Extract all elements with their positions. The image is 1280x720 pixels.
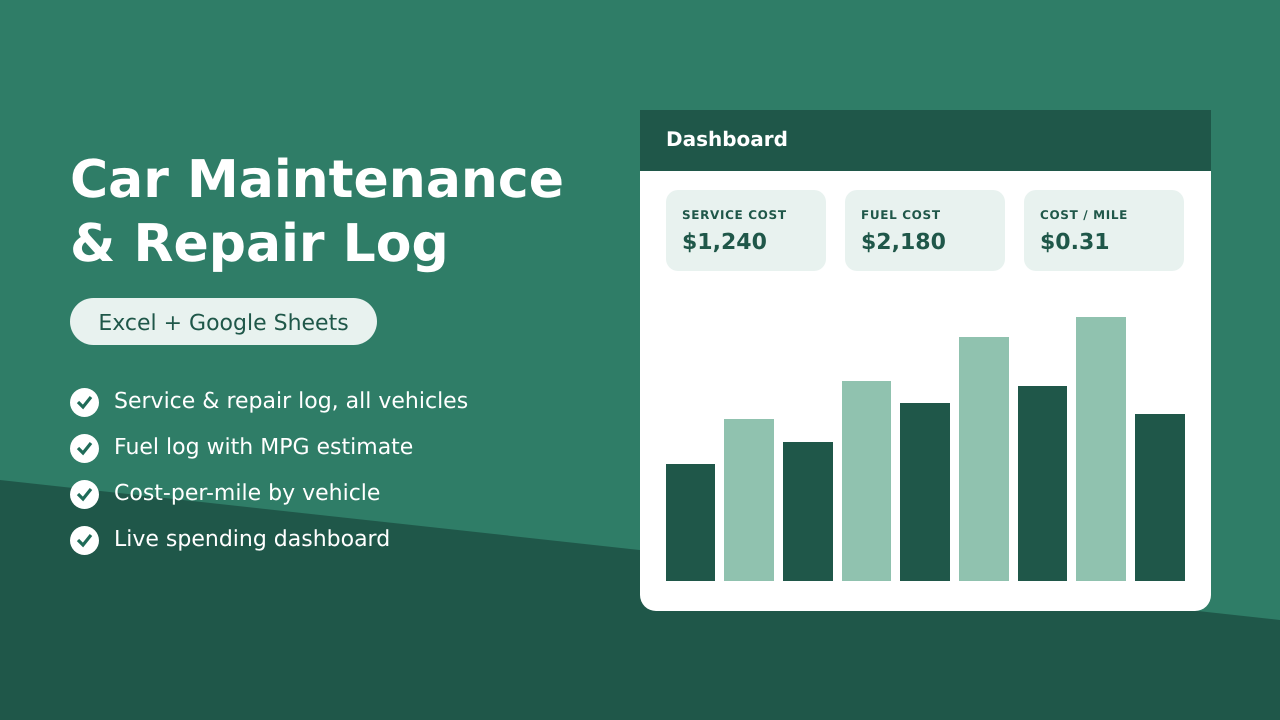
stat: service cost	[666, 190, 826, 271]
icon: check 4	[70, 526, 99, 555]
stat: fuel cost	[845, 190, 1005, 271]
stat: fuel cost: $2,180	[861, 230, 946, 255]
title	[70, 150, 564, 274]
title: & Repair Log	[70, 214, 449, 274]
feature list	[70, 388, 468, 555]
stat: cost per mile: COST / MILE	[1040, 208, 1128, 222]
stat: cost per mile	[1024, 190, 1184, 271]
icon: check 2	[70, 434, 99, 463]
feature 2: Fuel log with MPG estimate	[114, 435, 413, 460]
feature 3: Cost-per-mile by vehicle	[114, 481, 380, 506]
panel: dashboard	[640, 110, 1211, 611]
icon: check 3	[70, 480, 99, 509]
dashboard heading: Dashboard	[666, 127, 788, 151]
stat: service cost: SERVICE COST	[682, 208, 787, 222]
icon: check 1	[70, 388, 99, 417]
dashboard header	[640, 110, 1211, 171]
feature 1: Service & repair log, all vehicles	[114, 389, 468, 414]
format pill: Excel + Google Sheets	[98, 311, 349, 336]
feature 4: Live spending dashboard	[114, 527, 390, 552]
bar chart	[666, 317, 1185, 581]
format pill	[70, 298, 377, 345]
stat: service cost: $1,240	[682, 230, 767, 255]
stat: fuel cost: FUEL COST	[861, 208, 941, 222]
stat: cost per mile: $0.31	[1040, 230, 1110, 255]
title: Car Maintenance	[70, 150, 564, 210]
